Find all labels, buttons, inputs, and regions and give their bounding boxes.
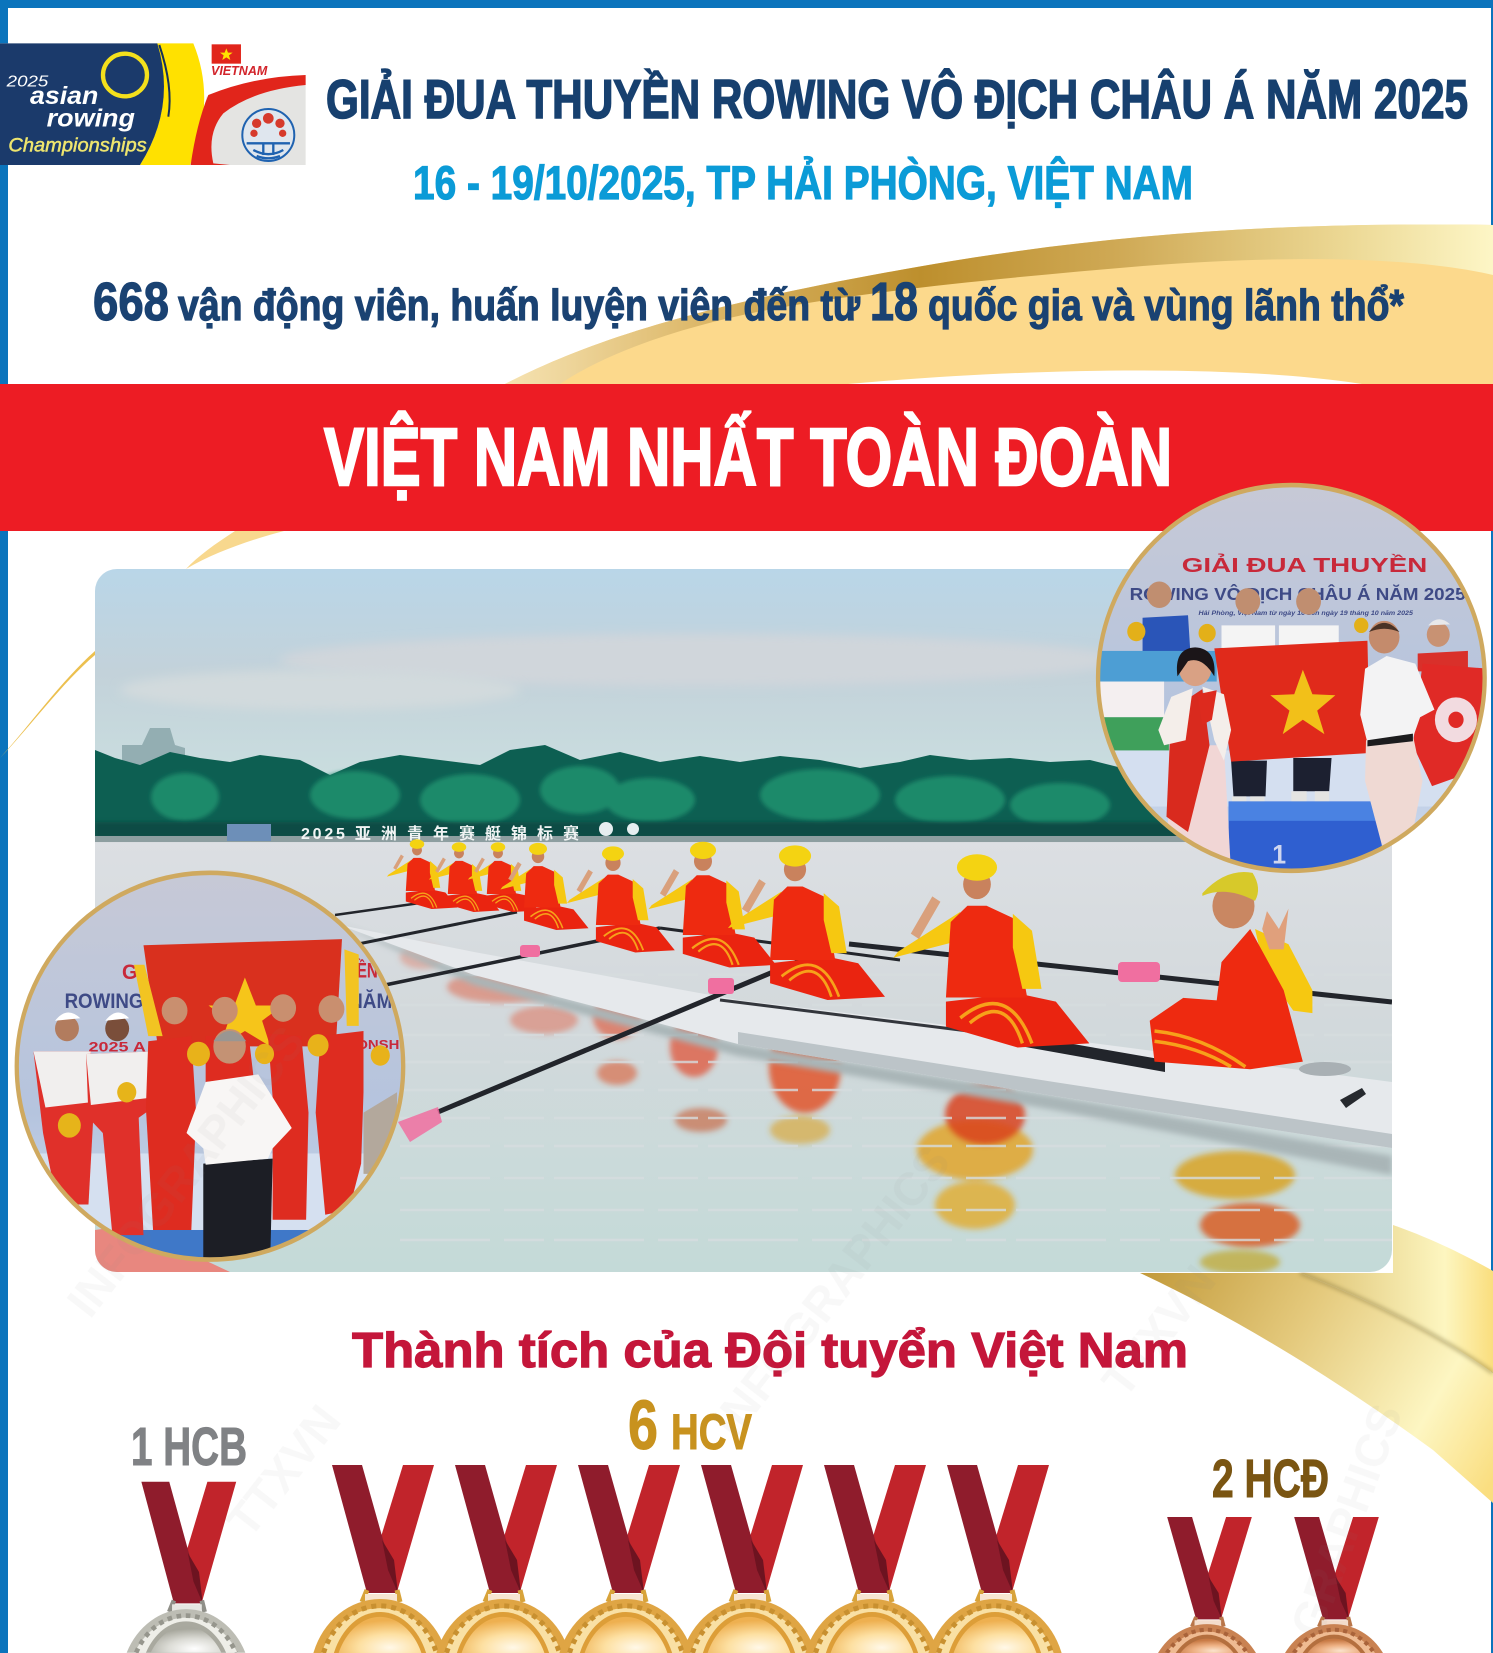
- inset text on backdrop: ROWING: [65, 989, 143, 1013]
- photo: distant building: [122, 728, 185, 765]
- inset: official in white shirt: [187, 1029, 292, 1261]
- logo: Vietnam flag: [212, 44, 241, 64]
- inset text on backdrop: [65, 959, 399, 1055]
- logo wordmark: 2025: 2025: [5, 74, 48, 91]
- inset: sunflower bouquets: [187, 1034, 390, 1066]
- photo: lead rower: [1150, 872, 1312, 1069]
- section heading: team results: Thành tích của Đội tuyển Việt Nam: [352, 1324, 1188, 1378]
- logo: 2025 Asian Rowing Championships: [0, 43, 306, 165]
- photo: boat hull: [340, 925, 1392, 1175]
- inset: gold ring: [1098, 485, 1485, 871]
- watermarks: GRAPHICS: [1281, 1397, 1412, 1643]
- inset: Indonesian athletes: [33, 1012, 153, 1235]
- photo: shoreline: [95, 836, 1186, 842]
- bronze count label: 2 HCĐ: [1212, 1449, 1329, 1509]
- date and location subtitle: 16 - 19/10/2025, TP HẢI PHÒNG, VIỆT NAM: [413, 156, 1193, 209]
- inset: backdrop heading: GIẢI ĐUA THUYỀN: [1182, 553, 1427, 577]
- photo: water reflections: [400, 945, 1300, 1274]
- gold medals: [313, 1465, 1062, 1653]
- gold swoosh: top right: [505, 224, 1493, 384]
- inset text on backdrop: YỀN: [347, 959, 378, 983]
- inset: official at right edge: [364, 1092, 397, 1174]
- inset text on backdrop: 2025 A: [88, 1038, 146, 1055]
- gold count label: [628, 1386, 752, 1464]
- logo wordmark: rowing: rowing: [47, 105, 136, 133]
- logo: Hai Phong emblem: [242, 109, 294, 161]
- photo: oars: [335, 903, 1392, 1112]
- photo: pink oar blades and grips: [398, 945, 1160, 1142]
- inset: backdrop subheading: ROWING VÔ ĐỊCH CHÂU Á NĂM 2025: [1130, 584, 1466, 604]
- bronze medals: [1158, 1517, 1383, 1653]
- photo: treeline: [95, 745, 1195, 842]
- inset: athletes behind flag: [1143, 582, 1468, 809]
- participants line: 668: [93, 272, 169, 332]
- inset: Vietnamese athletes in red: [146, 1031, 364, 1230]
- silver medal: [127, 1482, 245, 1653]
- inset: backdrop small line: Hải Phòng, Việt Nam từ ngày 16 đến ngày 19 tháng 10 năm 2025: [1199, 610, 1414, 617]
- logo: VIETNAM label: VIETNAM: [211, 64, 268, 78]
- inset: raised yellow arms: [134, 949, 359, 1036]
- participants line: vận động viên, huấn luyện viên đến từ: [178, 281, 860, 330]
- inset: Vietnam flag: [1214, 641, 1370, 762]
- inset: Hong Kong flag: [1414, 667, 1482, 786]
- silver count label: 1 HCB: [131, 1417, 247, 1477]
- watermarks: TTXVN: [1092, 1255, 1226, 1406]
- red banner: [0, 384, 1493, 531]
- watermarks: TTXVN: [217, 1395, 351, 1546]
- watermarks: INFOGRAPHICS: [57, 1016, 315, 1326]
- photo: water ripple lines: [400, 975, 1392, 1240]
- inset: official in white shirt: [1360, 621, 1434, 845]
- inset: woman in ao dai: [1158, 647, 1231, 873]
- inset photo: women's team podium: [14, 868, 407, 1276]
- inset text on backdrop: NĂM: [349, 989, 392, 1013]
- participants line: quốc gia và vùng lãnh thổ*: [928, 281, 1405, 330]
- photo: regatta banner: [227, 822, 639, 843]
- participants line: 18: [870, 272, 918, 332]
- logo wordmark: Championships: Championships: [8, 136, 147, 157]
- logo wordmark: asian: asian: [30, 82, 98, 110]
- inset text on backdrop: ONSH: [356, 1036, 399, 1052]
- inset: Vietnam flag: [143, 939, 342, 1046]
- inset: sunflower bouquets: [1127, 618, 1368, 642]
- watermarks: INFOGRAPHICS: [702, 1136, 960, 1446]
- gold count label: 6: [628, 1386, 658, 1464]
- gold swoosh: bottom right: [1140, 1225, 1493, 1503]
- gold count label: HCV: [671, 1404, 752, 1460]
- gold swoosh: left below banner: [0, 531, 284, 758]
- inset: gold ring: [17, 873, 403, 1260]
- photo: pink stern corner: [95, 1225, 230, 1272]
- watermarks: [57, 1016, 1412, 1643]
- main photo: rowing crew on the water: [95, 569, 1392, 1274]
- inset photo: Vietnam flag on podium: [1095, 480, 1492, 878]
- inset: podium: 1: [1272, 841, 1286, 870]
- photo: rowers in red and yellow: [387, 839, 1089, 1047]
- photo: regatta banner: 2025 亚 洲 青 年 赛 艇 锦 标 赛: [301, 824, 579, 843]
- participants line: [93, 272, 1405, 332]
- inset: podium: [1229, 801, 1382, 873]
- banner heading: VIỆT NAM NHẤT TOÀN ĐOÀN: [324, 412, 1172, 503]
- inset: Uzbekistan flag: [1097, 651, 1217, 750]
- inset text on backdrop: G: [122, 960, 138, 984]
